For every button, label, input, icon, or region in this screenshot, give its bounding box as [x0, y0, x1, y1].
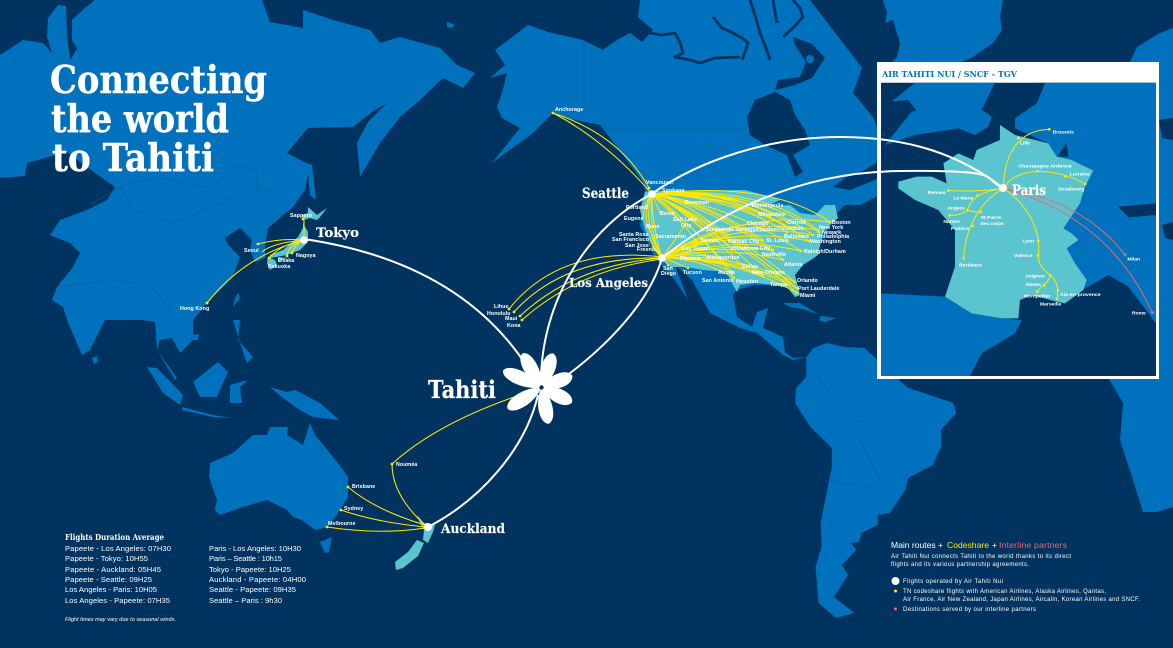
land: Africa [1100, 379, 1173, 512]
city labels: Dallas [742, 264, 758, 270]
hub labels: Paris [1012, 183, 1046, 199]
legend intro text: Air Tahiti Nui connects Tahiti to the world thanks to its direct [891, 554, 1071, 560]
inset land: Britain [885, 83, 995, 145]
city labels: Osaka [278, 258, 294, 264]
codeshare routes: Seattle fan [643, 190, 830, 293]
city labels: Chicago [747, 221, 769, 227]
main route: Los Angeles to Tahiti [558, 258, 662, 382]
hub labels: Tokyo [316, 226, 359, 241]
city labels: Sacramento [655, 234, 687, 240]
durations column one: Papeete - Auckland: 05H45 [65, 565, 161, 574]
durations note: Flight times may vary due to seasonal winds. [65, 617, 176, 623]
teal: United States [640, 190, 838, 297]
city labels: Bozeman [685, 200, 709, 206]
legend item: flights operated: Flights operated by Air Tahiti Nui [903, 579, 1003, 585]
city labels: Sydney [344, 506, 363, 512]
land: Eurasia [0, 0, 475, 380]
durations column two [209, 544, 306, 605]
city labels: Portland [626, 205, 648, 211]
inset heading: AIR TAHITI NUI / SNCF - TGV [881, 70, 1017, 80]
inset city labels: Angers [947, 206, 965, 212]
durations column two: Paris – Seattle : 10h15 [209, 554, 282, 563]
legend item: codeshare [894, 589, 1140, 603]
main route: Tokyo to Tahiti [304, 239, 528, 368]
legend [891, 540, 1140, 613]
legend heading [891, 540, 1067, 550]
inset city labels: Strasbourg [1058, 186, 1084, 192]
hub labels: Los Angeles [569, 275, 648, 290]
city labels: Nouméa [396, 462, 417, 468]
dark water: Hudson Bay and Foxe Basin [747, 37, 825, 177]
legend item: flights operated [892, 577, 1003, 585]
country borders [57, 40, 880, 490]
city labels: Fresno [637, 247, 656, 253]
inset city labels [928, 130, 1146, 317]
inset city labels: Lille [1020, 141, 1030, 147]
city labels: Hong Kong [180, 306, 209, 312]
durations column two: Seattle – Paris : 9h30 [209, 596, 282, 605]
city labels: Washington [810, 239, 841, 245]
inset land: Spain [881, 293, 1022, 376]
inset city labels: Rennes [928, 190, 946, 196]
hub labels [316, 183, 1046, 537]
inset city labels: Nimes [1026, 282, 1041, 288]
main route: Seattle to Tahiti [541, 194, 652, 385]
land: Europe right edge [1159, 62, 1173, 379]
codeshare routes: Tokyo [206, 218, 304, 304]
inset city labels: Champagne Ardenne [1018, 163, 1072, 169]
land: Cuba and Hispaniola [783, 303, 836, 322]
hub dots [300, 184, 1007, 531]
legend intro text [891, 554, 1071, 568]
inset TGV station dots [947, 128, 1087, 300]
inset map of France [881, 83, 1156, 376]
inset city labels: Le Mans [953, 196, 974, 202]
city labels: New York [819, 225, 843, 231]
inset city labels: des corps [980, 221, 1004, 227]
inset city labels: Nantes [943, 219, 960, 225]
durations column one: Los Angeles - Papeete: 07H35 [65, 596, 170, 605]
city labels: New Orleans [752, 270, 785, 276]
city labels: City [681, 223, 691, 229]
legend intro text: flights and its various partnership agreements. [891, 562, 1029, 568]
hub labels: Auckland [440, 522, 505, 537]
city labels: Orlando [797, 278, 819, 284]
title [50, 57, 267, 180]
city labels: Kansas City [728, 239, 759, 245]
city labels: Oklahoma City [732, 246, 770, 252]
inset city labels: Brussels [1053, 130, 1074, 136]
city labels: Brisbane [352, 484, 375, 490]
inset city labels: Avignon [1025, 274, 1045, 280]
icon: Tahiti tiare flower [500, 350, 575, 425]
city labels: San Antonio [702, 278, 735, 284]
land: North America [490, 0, 880, 360]
inset dark patches: Luxembourg and Switzerland [1058, 143, 1156, 217]
inset sea [881, 83, 1156, 376]
durations column one: Papeete - Seattle: 09H25 [65, 575, 152, 584]
legend item: codeshare: TN codeshare flights with American Airlines, Alaska Airlines, Qantas, [903, 589, 1106, 595]
city labels: Maui [505, 316, 518, 322]
inset city labels: Milan [1127, 256, 1140, 262]
city labels: Miami [800, 293, 816, 299]
city labels: Austin [718, 270, 735, 276]
inset city labels: Montpellier [1024, 294, 1051, 300]
city labels: Diego [661, 271, 677, 277]
city labels: Seoul [244, 248, 259, 254]
city labels: Tampa [770, 282, 787, 288]
codeshare routes: Anchorage [552, 112, 652, 194]
inset TGV routes [948, 129, 1085, 299]
city labels: Honolulu [487, 311, 511, 317]
legend heading: + [992, 540, 997, 550]
inset city labels: Marseille [1040, 302, 1062, 308]
city labels: Columbus [777, 226, 804, 232]
durations column one: Papeete - Tokyo: 10H55 [65, 554, 148, 563]
city labels: San [663, 266, 673, 272]
durations column one [65, 544, 171, 605]
city labels: Phoenix [680, 256, 701, 262]
inset city labels: Aix-en-provence [1060, 292, 1101, 298]
city labels: Las Vegas [682, 246, 709, 252]
legend heading: Codeshare [947, 540, 989, 550]
city labels: San Francisco [612, 237, 650, 243]
inset panel frame: Air Tahiti Nui / SNCF - TGV [877, 62, 1159, 379]
title: Connecting [50, 57, 267, 102]
land: Scandinavia [1130, 28, 1173, 62]
city labels: Reno [646, 224, 660, 230]
durations column two: Auckland - Papeete: 04H00 [209, 575, 306, 584]
legend heading: Main routes + [891, 540, 943, 550]
city labels: Lihue [494, 304, 509, 310]
city labels: Denver [701, 238, 719, 244]
city labels: Atlanta [784, 262, 803, 268]
land: Greenland [883, 0, 1003, 62]
main route: Seattle to Paris [653, 137, 1003, 193]
dark water: Black Sea and Mediterranean fragments [1159, 118, 1173, 240]
legend item: codeshare: Air France, Air New Zealand, Japan Airlines, Aircalin, Korean Airlines and SNCF. [903, 597, 1140, 603]
inset teal: France [898, 125, 1093, 318]
hub labels: Seattle [582, 186, 629, 202]
city labels: San Jose [625, 243, 649, 249]
city labels: Eugene [624, 216, 644, 222]
flight durations table [65, 532, 306, 623]
inset land: northern and eastern Europe [1015, 83, 1156, 323]
main route: Los Angeles to Paris [662, 171, 1003, 258]
land: South America [795, 343, 956, 618]
city labels: Minneapolis [752, 203, 784, 209]
city labels: Santa Rosa [619, 232, 649, 238]
inset city labels: St Pierre [981, 215, 1001, 221]
city labels: Kona [507, 323, 521, 329]
city labels: Nagoya [296, 253, 316, 259]
city labels: Houston [736, 279, 758, 285]
durations column one: Los Angeles - Paris: 10H05 [65, 585, 157, 594]
dark water: Arctic channels [650, 0, 803, 63]
inset interline dots [1123, 253, 1154, 314]
city labels: Detroit [788, 220, 806, 226]
inset city labels: Poitiers [951, 226, 970, 232]
inset city labels: Rome [1132, 311, 1146, 317]
city labels: Newark [822, 230, 841, 236]
city labels: Anchorage [555, 107, 583, 113]
city labels: Philadelphia [817, 234, 849, 240]
teal: New Zealand [395, 515, 435, 570]
durations column two: Tokyo - Papeete: 10H25 [209, 565, 291, 574]
land: Australia and Tasmania [209, 423, 348, 553]
US city dots [659, 202, 831, 294]
city labels: Melbourne [328, 521, 356, 527]
city labels: Sapporo [290, 213, 313, 219]
codeshare routes: Oceania [326, 390, 535, 531]
durations column two: Paris - Los Angeles: 10H30 [209, 544, 301, 553]
title: the world [51, 96, 229, 141]
title: to Tahiti [52, 135, 214, 180]
city labels: Nashville [762, 252, 786, 258]
codeshare routes: Hawaii [508, 255, 662, 321]
city labels: Albuquerque [706, 255, 740, 261]
city labels: St. Louis [766, 238, 789, 244]
hub labels: Tahiti [428, 375, 496, 404]
city labels [180, 107, 851, 527]
city labels: Fukuoka [268, 264, 290, 270]
city labels: Steamboat Springs/Hayden [706, 227, 777, 233]
durations heading: Flights Duration Average [65, 532, 164, 542]
inset city labels: Lorraine [1070, 171, 1090, 177]
city labels: Port Lauderdale [798, 286, 840, 292]
teal: Japan [267, 207, 327, 270]
city labels: Spokane [662, 188, 685, 194]
city labels: Vancouver [646, 180, 674, 186]
inset interline routes [1004, 188, 1152, 313]
city labels: Salt Lake [673, 217, 697, 223]
land: island in Foxe Basin [806, 55, 814, 63]
inset city labels: Valence [1014, 253, 1033, 259]
city labels: Tucson [683, 270, 702, 276]
main route: Auckland to Tahiti [428, 395, 538, 527]
legend heading: Interline partners [999, 540, 1067, 550]
inset city labels: Lyon [1022, 239, 1034, 245]
inset city labels: Bordeaux [959, 262, 982, 268]
city labels: Boise [660, 211, 675, 217]
city labels: Boston [832, 220, 851, 226]
durations column two: Seattle - Papeete: 09H35 [209, 585, 296, 594]
codeshare routes: Los Angeles fan [647, 220, 830, 293]
city labels: Raleigh/Durham [804, 249, 846, 255]
land: Sakhalin and islands of Asia [92, 22, 455, 420]
city labels: Milwaukee [758, 212, 785, 218]
city labels: Baltimore [784, 234, 809, 240]
durations column one: Papeete - Los Angeles: 07H30 [65, 544, 171, 553]
legend item: interline: Destinations served by our interline partners [903, 607, 1036, 613]
